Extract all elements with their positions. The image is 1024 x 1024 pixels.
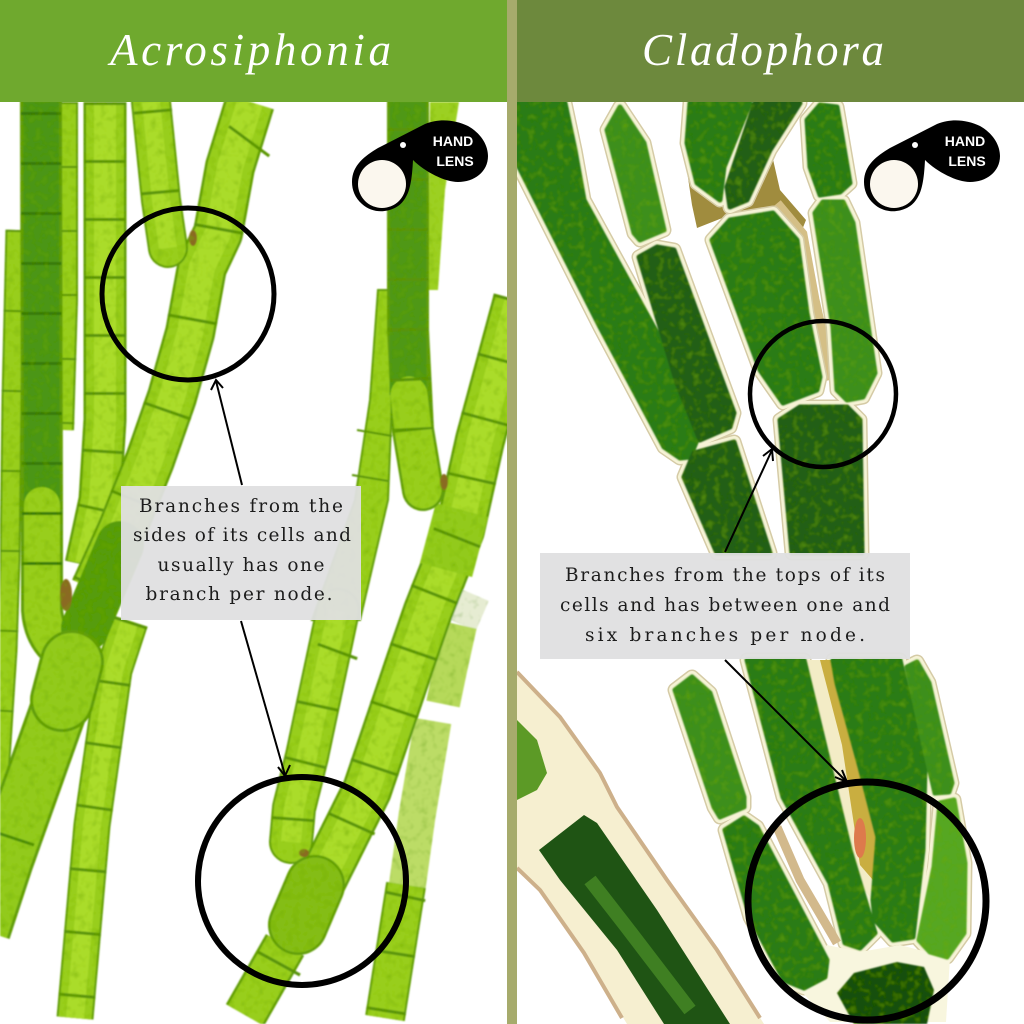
circle: Cladophora lower node <box>748 782 986 1020</box>
header: Acrosiphonia <box>0 0 507 102</box>
filament: far left edge <box>0 230 16 790</box>
callout: Acrosiphonia: sides of its cells and <box>133 525 351 546</box>
cell: lower left short <box>675 677 744 817</box>
cell: right narrow upper <box>907 662 952 793</box>
callout: Acrosiphonia: branch per node. <box>146 584 332 605</box>
header: Cladophora <box>517 0 1024 102</box>
filament: narrow second column <box>64 102 68 430</box>
arrow: Cladophora up <box>725 449 773 552</box>
big lower-left filament <box>517 670 764 1024</box>
cell: stem centre <box>780 407 862 553</box>
cell: right long <box>815 202 875 400</box>
filament: pale right branch <box>385 595 475 1018</box>
filament: middle long branch <box>291 290 392 842</box>
arrow: Acrosiphonia down <box>241 621 290 776</box>
filament: dark left column <box>41 102 62 650</box>
panel: Cladophora <box>517 103 965 1024</box>
cell: top right small <box>807 105 850 195</box>
filament: main left stem <box>0 102 250 930</box>
callout: Cladophora <box>540 553 910 659</box>
arrow: Cladophora down <box>725 660 847 782</box>
small green cell <box>517 720 547 800</box>
cell: right narrow lower <box>919 800 965 957</box>
filament: lower circle thick cell <box>245 885 315 1015</box>
cell: top cluster right <box>727 103 800 207</box>
wall rim <box>517 672 760 1018</box>
callout: Acrosiphonia <box>121 486 361 620</box>
cell: top cluster left <box>687 103 750 200</box>
icon: hand lens right <box>864 120 1000 211</box>
icon: hand lens left: HAND <box>433 133 473 149</box>
icon: hand lens right: LENS <box>948 153 986 169</box>
header: Cladophora: Cladophora <box>642 25 884 75</box>
cell highlight <box>590 880 690 1010</box>
header: Acrosiphonia: Acrosiphonia <box>107 25 391 75</box>
circle: Acrosiphonia lower node <box>198 777 406 985</box>
center divider <box>507 0 517 1024</box>
filament: right main stem <box>322 300 518 880</box>
dark cell <box>539 815 730 1024</box>
icon: hand lens right: HAND <box>945 133 985 149</box>
cell: bottom base <box>837 962 934 1024</box>
wall band right of big cell <box>775 205 830 380</box>
filament: upper right narrow <box>428 102 459 290</box>
filament: third column <box>86 102 105 565</box>
icon: hand lens left <box>352 120 488 211</box>
cell: stem continuation <box>747 660 875 948</box>
cell: third lower <box>684 442 770 553</box>
callout: Cladophora: cells and has between one and <box>560 595 890 616</box>
callout: Cladophora: six branches per node. <box>585 625 865 646</box>
icon: hand lens left: LENS <box>436 153 474 169</box>
panel: Acrosiphonia <box>0 102 518 1018</box>
junction debris <box>60 230 448 857</box>
top olive debris <box>688 160 806 228</box>
cell: small top <box>607 107 664 240</box>
cell: right continuation <box>833 660 925 940</box>
filament wall <box>517 670 764 1024</box>
cell wall halo cream <box>517 103 965 988</box>
cell: large centre <box>712 213 820 403</box>
filament: lower left column <box>75 621 130 1018</box>
filament: right column branch <box>408 102 423 490</box>
base cream wall <box>800 945 950 1022</box>
callout: Cladophora: Branches from the tops of its <box>565 565 885 586</box>
circle: Acrosiphonia upper node <box>102 208 274 380</box>
cell wall halo rim <box>517 103 965 988</box>
algal cells <box>517 103 965 1024</box>
strip: debris between lower cells <box>777 660 878 943</box>
arrow: Acrosiphonia up <box>211 380 242 485</box>
filament: upper branch in circle <box>151 102 168 248</box>
circle: Cladophora upper node <box>750 321 896 467</box>
cell: long upper left <box>517 103 697 458</box>
cell: lower left long <box>725 818 827 988</box>
callout: Acrosiphonia: Branches from the <box>139 496 343 517</box>
callout: Acrosiphonia: usually has one <box>158 555 325 576</box>
filaments: Acrosiphonia green algae <box>0 102 518 1018</box>
cell: dark second <box>639 247 734 440</box>
